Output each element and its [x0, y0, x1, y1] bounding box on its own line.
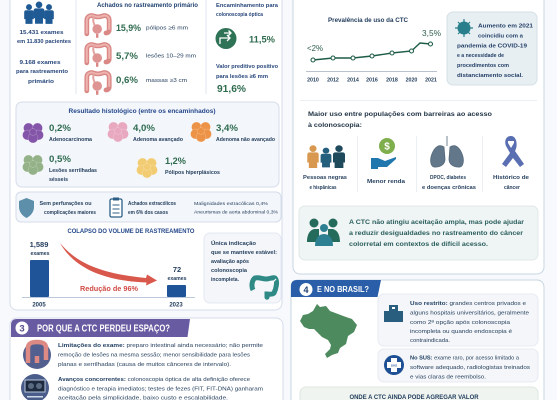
text: exames: 9.168 exames: [20, 60, 60, 66]
text: malignidades: Aneurismas de aorta abdominal 0,3%: [194, 210, 279, 216]
item: DPOC: e doenças crônicas: [422, 185, 476, 191]
callout: única indicação: [204, 233, 281, 303]
text: limitações: Limitações do exame: preparo intestinal ainda necessário; não permite: [58, 343, 263, 349]
stat: 15,9%: pólipos ≥6 mm: [146, 26, 188, 32]
callout: covid-19: e a necessidade de: [457, 53, 504, 59]
text: malignidades: [194, 201, 279, 216]
stat: pólipos hiperplásicos: [136, 156, 220, 178]
stat: 5,7%: [116, 51, 196, 62]
callout: única indicação: incompleta.: [211, 277, 240, 283]
text: avanços: Avanços concorrentes: colonoscopia óptica de alta definição oferece: [58, 377, 250, 383]
icon: cólon 3: [87, 73, 109, 95]
callout: desigualdades: colorretal em contextos de difícil acesso.: [349, 241, 488, 248]
icon: prancheta: [110, 198, 122, 217]
icon: cólon 1: [87, 16, 109, 38]
panel: população do estudo: [16, 1, 71, 85]
icon: número 3: 3: [19, 324, 25, 334]
item: pessoas negras e hispânicas: Pessoas negras: [303, 175, 347, 181]
chart: prevalência: [306, 17, 441, 84]
stat: lesões serrilhadas: [22, 154, 97, 183]
icon: intestino: [23, 341, 51, 369]
arrow: redução: [60, 243, 157, 286]
bar: 2023: exames: [167, 276, 187, 282]
callout: única indicação: que se manteve estável:: [211, 250, 277, 256]
heading tab: [11, 319, 190, 337]
callout: SUS: [378, 349, 538, 382]
text: avanços: diagnóstico e terapia imediatos; testes de fezes (FIT, FIT-DNA) ganharam: [58, 386, 263, 392]
axis years: 2014: [347, 78, 359, 84]
bar: 2005: [30, 240, 50, 308]
bar: 2005: 2005: [32, 302, 46, 308]
stat: pólipos hiperplásicos: Pólipos hiperplásicos: [165, 170, 220, 176]
heading: colapso: COLAPSO DO VOLUME DE RASTREAMENTO: [68, 228, 195, 235]
callout: única indicação: avaliação após: [211, 259, 249, 265]
heading: histológico: Resultado histológico (entre os encaminhados): [68, 108, 216, 115]
stat: adenoma avançado: 4,0%: [133, 123, 156, 134]
bar: 2023: 2023: [169, 302, 183, 308]
item: DPOC: DPOC, diabetes: [430, 175, 466, 181]
stat: adenoma não avançado: 3,4%: [216, 123, 239, 134]
text: achados extracólicos: [128, 201, 176, 216]
item: menor renda: [367, 138, 406, 185]
stat: 0,6%: 0,6%: [116, 75, 139, 86]
text: valor preditivo: [216, 64, 279, 80]
text: redução de 96%: Redução de 96%: [80, 284, 139, 293]
icon: SUS: [384, 355, 404, 375]
stat: lesões serrilhadas: sésseis: [49, 177, 68, 183]
chart: colapso do volume: [22, 228, 281, 308]
text: exames: em 11.830 pacientes: [17, 39, 71, 45]
item: menor renda: $: [384, 142, 390, 152]
line series: [311, 42, 432, 62]
stat: 15,9%: 15,9%: [116, 23, 142, 34]
heading: encaminhamento: [216, 3, 279, 18]
bar: 2023: [167, 265, 187, 308]
callout: covid-19: coincidiu com a: [478, 34, 524, 40]
heading tab: [291, 280, 381, 297]
panel: resultado histológico: [16, 102, 279, 187]
panel: e no Brasil: [291, 280, 544, 400]
callout: uso restrito: como 2ª opção após colonoscopia: [410, 319, 511, 326]
stat: adenoma não avançado: [190, 122, 276, 143]
stat: adenocarcinoma: [22, 123, 92, 143]
stat: adenoma não avançado: Adenoma não avançado: [216, 137, 276, 143]
label: 3,5%: 3,5%: [422, 29, 441, 38]
callout: covid-19: Aumento em 2021: [478, 24, 533, 30]
text: sem perfurações: Sem perfurações ou: [40, 201, 92, 207]
text: limitações: remoção de lesões na mesma sessão; menor sensibilidade para lesões: [58, 352, 250, 358]
map: Brasil: [300, 304, 357, 358]
heading: prevalência: Prevalência de uso da CTC: [328, 17, 409, 24]
icon: monitor: [21, 374, 49, 400]
panel: onde agregar valor: [300, 387, 538, 400]
stat: lesões serrilhadas: Lesões serrilhadas: [49, 168, 97, 174]
callout: única indicação: colonoscopia: [211, 268, 247, 274]
axis years: 2021: [425, 78, 437, 84]
icon: número 4: [300, 283, 312, 296]
icon: vírus: [455, 19, 473, 37]
callout: covid-19: distanciamento social.: [457, 73, 523, 79]
text: exames: primário: [28, 79, 55, 85]
heading: encaminhamento: colonoscopia óptica: [216, 12, 264, 18]
text: exames: [16, 30, 71, 85]
callout: uso restrito: incompleta ou quando endoscopia é: [410, 329, 512, 335]
panel: por que a CTC perdeu espaço: [10, 318, 283, 400]
text: valor preditivo: para lesões ≥6 mm: [216, 74, 268, 80]
text: avanços: [58, 377, 263, 400]
stat: 91,6%: 91,6%: [217, 84, 246, 95]
axis years: 2010: [307, 78, 319, 84]
item: menor renda: Menor renda: [367, 179, 406, 185]
icon: pessoas: [24, 1, 54, 24]
stat: 0,6%: massas ≥3 cm: [146, 78, 187, 84]
text: achados extracólicos: Achados extracólicos: [128, 201, 176, 207]
panel: prevalência e acesso: [293, 0, 544, 274]
stat: pólipos hiperplásicos: 1,2%: [165, 156, 187, 167]
icon: cólon: [252, 278, 277, 297]
callout: covid-19: [447, 12, 537, 85]
callout: uso restrito: alguns hospitais universitários, geralmente: [410, 310, 529, 316]
bar: 2005: exames: [30, 251, 50, 257]
text: exames: para rastreamento: [16, 69, 69, 75]
heading: maior uso: [308, 111, 492, 129]
item: pessoas negras e hispânicas: e hispânicas: [310, 185, 337, 191]
callout: desigualdades: [299, 206, 538, 260]
callout: desigualdades: A CTC não atingiu aceitação ampla, mas pode ajudar: [349, 219, 524, 226]
bar: 2005: 1,589: [30, 240, 48, 249]
callout: SUS: No SUS: exame raro, por acesso limitado a: [410, 356, 520, 362]
text: sem perfurações: complicações maiores: [44, 210, 96, 216]
heading: POR QUE A CTC PERDEU ESPAÇO?: [37, 324, 170, 334]
stat: 5,7%: 5,7%: [116, 51, 139, 62]
stat: adenocarcinoma: Adenocarcinoma: [49, 137, 92, 143]
label: <2%: <2%: [307, 44, 323, 53]
panel: encaminhamento: [216, 3, 279, 95]
icon: número 4: 4: [303, 285, 309, 295]
stat: lesões serrilhadas: 0,5%: [49, 154, 72, 165]
text: valor preditivo: Valor preditivo positivo: [216, 64, 279, 70]
axis years: 2018: [386, 78, 398, 84]
text: achados extracólicos: em 6% dos casos: [128, 210, 168, 216]
stat: 0,6%: [116, 75, 187, 86]
callout: covid-19: procedimentos com: [457, 63, 509, 69]
text: sem perfurações: [40, 201, 96, 216]
heading: maior uso: à colonoscopia:: [308, 122, 362, 129]
item: pessoas negras e hispânicas: [303, 145, 347, 191]
heading: encaminhamento: Encaminhamento para: [216, 3, 279, 9]
axis years: 2012: [327, 78, 339, 84]
item: histórico de câncer: [493, 136, 529, 191]
icon: setas: [216, 28, 236, 49]
icon: número 3: [16, 322, 28, 334]
callout: uso restrito: [378, 294, 538, 346]
text: exames: 15.431 exames: [20, 30, 64, 36]
callout: desigualdades: a reduzir desigualdades no rastreamento do câncer: [349, 230, 524, 237]
icon: SUS: SUS: [391, 364, 397, 368]
panel: segurança e achados extracolônicos: [16, 192, 281, 222]
callout: única indicação: Única indicação: [211, 240, 256, 247]
item: histórico de câncer: câncer: [504, 185, 520, 191]
text: malignidades: Malignidades extracólicas 0,4%: [194, 201, 269, 207]
heading: maior uso: Maior uso entre populações com barreiras ao acesso: [308, 111, 492, 118]
axis years: 2020: [406, 78, 417, 84]
heading: E NO BRASIL?: [317, 285, 369, 294]
callout: SUS: software adequado, radiologistas treinados: [410, 365, 530, 371]
icon: escudo: [19, 198, 34, 218]
stat: 15,9%: [116, 23, 188, 34]
stat: adenoma avançado: [108, 122, 184, 143]
stat: adenoma avançado: Adenoma avançado: [133, 137, 184, 143]
icon: grupo: [307, 218, 340, 246]
stat: adenocarcinoma: 0,2%: [49, 123, 72, 134]
axis years: 2016: [366, 78, 378, 84]
item: DPOC: [422, 136, 476, 191]
stat: 5,7%: lesões 10–29 mm: [146, 54, 196, 60]
callout: uso restrito: Uso restrito: grandes centros privados e: [410, 301, 526, 307]
item: histórico de câncer: Histórico de: [493, 175, 529, 181]
callout: uso restrito: contraindicada.: [410, 338, 450, 344]
text: limitações: planas e serrilhadas (causa de muitos cânceres de intervalo).: [58, 362, 231, 368]
icon: hospital: [384, 305, 403, 322]
bar: 2023: 72: [173, 265, 181, 274]
heading: achados: Achados no rastreamento primário: [97, 3, 198, 9]
panel: achados no rastreamento: [87, 3, 198, 95]
callout: covid-19: pandemia de COVID-19: [457, 44, 527, 50]
axis years: [307, 78, 437, 84]
text: limitações: [58, 343, 263, 368]
callout: SUS: e vias claras de reembolso.: [410, 374, 486, 380]
stat: 11,5%: 11,5%: [249, 34, 276, 46]
icon: cólon 2: [87, 45, 109, 67]
